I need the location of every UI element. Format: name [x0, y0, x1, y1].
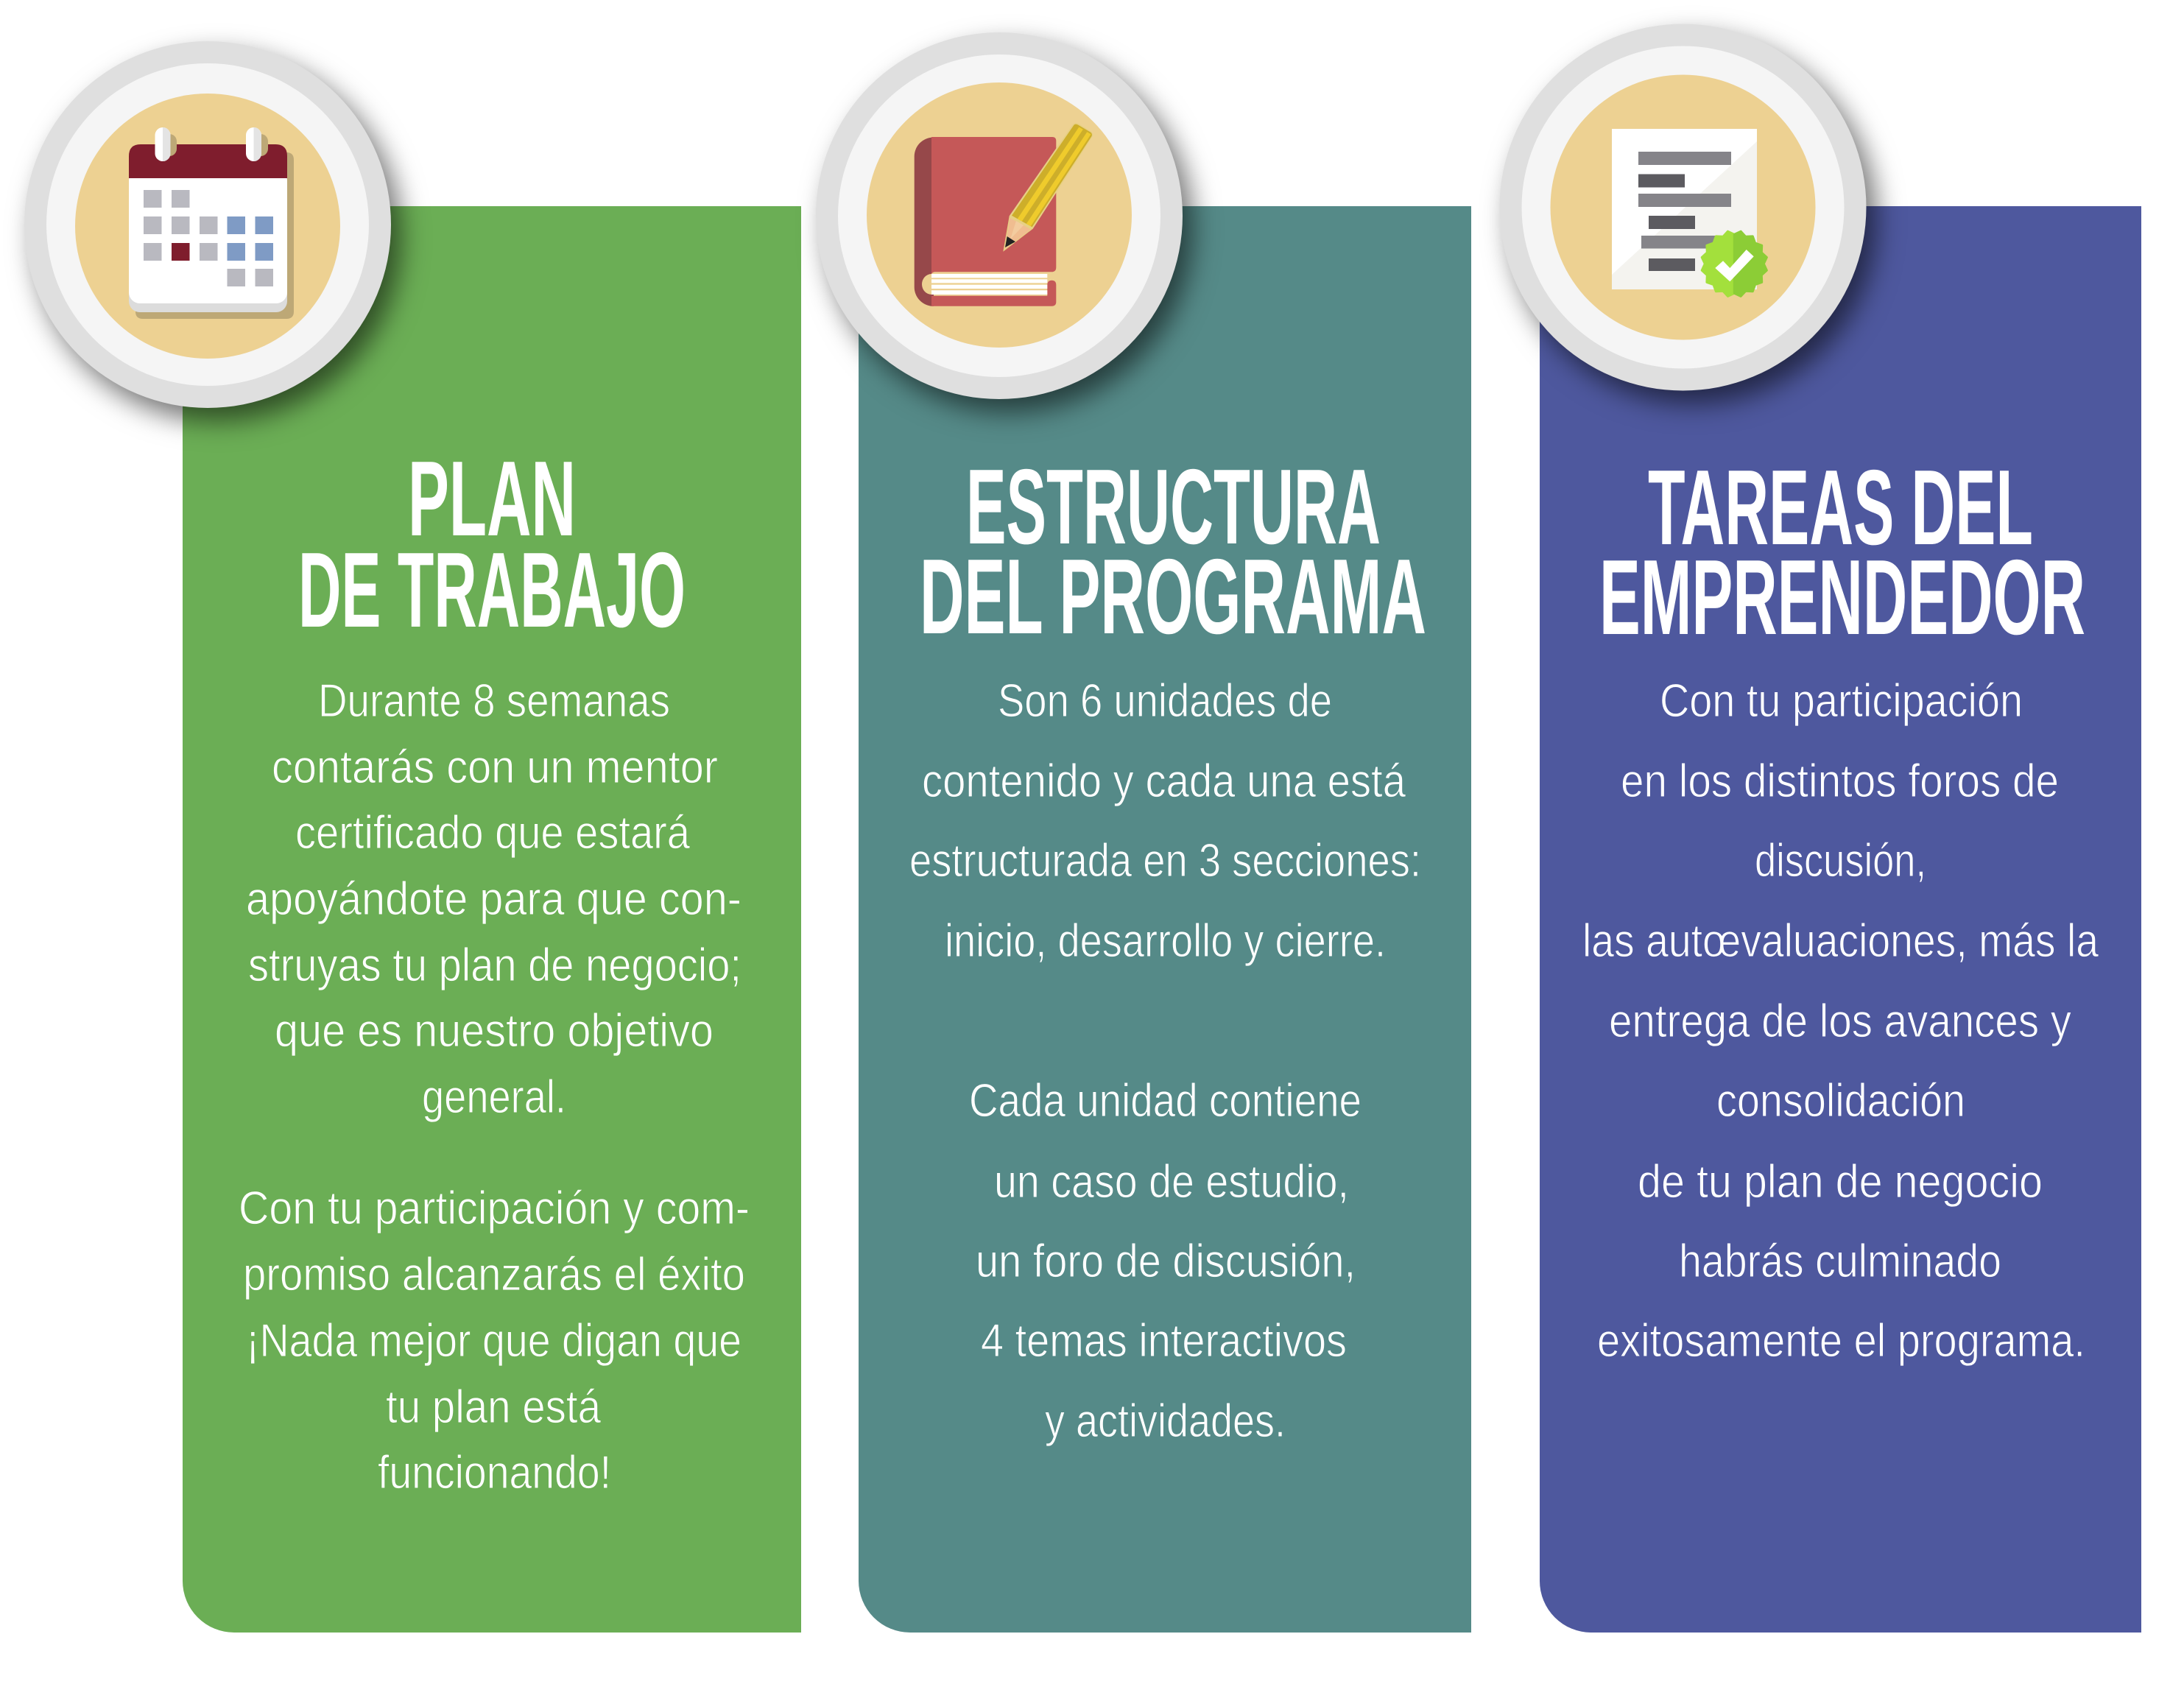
text block: tasks paragraph: las autœvaluaciones, más la: [1582, 915, 2099, 967]
heading: tareas del emprendedor: [1599, 448, 2085, 657]
text block: units paragraph: inicio, desarrollo y cierre.: [945, 915, 1386, 967]
text block: tasks paragraph: de tu plan de negocio: [1638, 1156, 2043, 1208]
text block: mentor paragraph: Durante 8 semanas: [318, 675, 670, 727]
text block: mentor paragraph: certificado que estará: [295, 807, 691, 859]
calendar day squares: [144, 190, 273, 286]
panel: estructura del programa: [859, 206, 1471, 1633]
text block: tasks paragraph: entrega de los avances y: [1609, 996, 2071, 1047]
text block: mentor paragraph: que es nuestro objetivo: [275, 1005, 714, 1057]
text block: unit contents paragraph: 4 temas interactivos: [981, 1315, 1347, 1367]
text block: tasks paragraph: exitosamente el programa.: [1597, 1315, 2085, 1367]
text block: tasks paragraph: [1582, 675, 2099, 1367]
text block: tasks paragraph: discusión,: [1755, 835, 1926, 887]
text block: mentor paragraph: [246, 675, 741, 1123]
heading: estructura del programa: DEL PROGRAMA: [920, 537, 1426, 656]
book back cover: [931, 281, 1056, 306]
text block: tasks paragraph: en los distintos foros de: [1621, 756, 2059, 807]
text block: participation paragraph: ¡Nada mejor que digan que: [246, 1315, 741, 1367]
text block: mentor paragraph: general.: [422, 1071, 566, 1123]
text block: units paragraph: estructurada en 3 secciones:: [909, 835, 1421, 887]
text block: mentor paragraph: apoyándote para que con-: [246, 873, 741, 925]
text block: unit contents paragraph: un foro de discusión,: [976, 1236, 1356, 1287]
panel: plan de trabajo: [183, 206, 801, 1633]
text block: participation paragraph: [239, 1183, 750, 1498]
heading: plan de trabajo: PLAN: [408, 439, 576, 558]
heading: estructura del programa: ESTRUCTURA: [966, 447, 1381, 566]
panel background: indigo: [1540, 206, 2141, 1633]
text block: tasks paragraph: Con tu participación: [1660, 675, 2023, 727]
text block: mentor paragraph: struyas tu plan de negocio;: [248, 940, 741, 991]
text block: unit contents paragraph: Cada unidad contiene: [969, 1075, 1362, 1127]
panel: tareas del emprendedor: [1540, 206, 2141, 1633]
heading: plan de trabajo: [298, 439, 686, 649]
text block: tasks paragraph: consolidación: [1716, 1075, 1965, 1127]
approval seal: [1702, 231, 1766, 296]
text block: units paragraph: contenido y cada una está: [922, 756, 1406, 807]
text block: participation paragraph: funcionando!: [378, 1447, 611, 1498]
panel background: green: [183, 206, 801, 1633]
calendar shadow: [135, 152, 294, 319]
calendar sheet: [129, 144, 287, 312]
calendar rings: [155, 127, 268, 161]
book cover: [931, 137, 1056, 274]
text block: participation paragraph: Con tu participación y com-: [239, 1183, 750, 1234]
heading: plan de trabajo: DE TRABAJO: [298, 530, 686, 649]
document text bars: [1638, 152, 1731, 271]
book spine: [915, 137, 934, 306]
text block: units paragraph: [909, 675, 1421, 967]
text block: unit contents paragraph: y actividades.: [1045, 1395, 1286, 1447]
icon: book and pencil badge: [816, 32, 1183, 399]
panel background: teal: [859, 206, 1471, 1633]
text block: tasks paragraph: habrás culminado: [1679, 1236, 2001, 1287]
book pages: [931, 274, 1047, 295]
pencil: [1003, 123, 1093, 252]
text block: unit contents paragraph: un caso de estudio,: [994, 1156, 1349, 1208]
icon: calendar badge: [24, 41, 391, 408]
text block: participation paragraph: tu plan está: [386, 1381, 602, 1433]
text block: units paragraph: Son 6 unidades de: [998, 675, 1332, 727]
text block: mentor paragraph: contarás con un mentor: [272, 742, 718, 793]
heading: estructura del programa: [920, 447, 1426, 656]
text block: participation paragraph: promiso alcanzarás el éxito: [243, 1249, 745, 1300]
icon: checked document badge: [1499, 24, 1866, 390]
document sheet: [1612, 129, 1757, 289]
text block: unit contents paragraph: [969, 1075, 1362, 1447]
